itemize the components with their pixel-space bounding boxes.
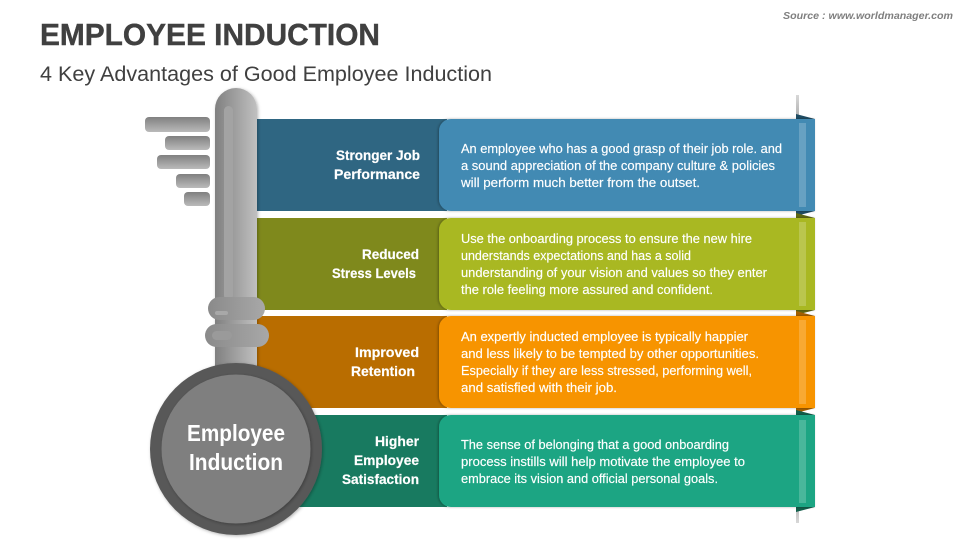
row 1: stronger job performance: [257, 114, 815, 216]
label band: [257, 119, 447, 211]
row 2: reduced stress levels: [257, 213, 815, 315]
description: process instills will help motivate the employee to: [461, 455, 745, 469]
row 4: higher employee satisfaction: [257, 410, 815, 512]
label: [332, 246, 419, 281]
label: Retention: [351, 363, 415, 379]
title: EMPLOYEE INDUCTION: [40, 17, 380, 52]
description: [461, 232, 767, 297]
label: Employee: [354, 452, 419, 468]
description: [460, 142, 782, 190]
key head inner disc: [162, 374, 310, 524]
label: Improved: [355, 344, 419, 360]
shaft highlight: [224, 106, 233, 300]
description: [461, 438, 745, 486]
description: [461, 330, 759, 395]
highlight stripe: [799, 420, 806, 503]
description: The sense of belonging that a good onboarding: [461, 438, 729, 452]
label band: [257, 316, 447, 408]
label: Stress Levels: [332, 265, 416, 281]
label: [334, 147, 420, 182]
key head label: [187, 420, 285, 475]
ribbon folds: [796, 114, 815, 216]
description: the role feeling more assured and confident.: [461, 283, 713, 297]
ribbon folds: [796, 213, 815, 315]
row 3: improved retention: [257, 311, 815, 413]
key illustration: [145, 88, 322, 535]
upper collar: [208, 297, 265, 320]
key teeth: [145, 117, 210, 206]
label: Stronger Job: [336, 147, 420, 163]
vertical ribbon spine: [796, 95, 799, 523]
description: a sound appreciation of the company culture & policies: [461, 159, 775, 173]
label: [351, 344, 419, 379]
description: understanding of your vision and values so they enter: [461, 266, 767, 280]
description: will perform much better from the outset.: [460, 176, 700, 190]
description: An employee who has a good grasp of their job role. and: [461, 142, 782, 156]
label band: [257, 415, 447, 507]
key shaft: [215, 88, 257, 380]
key head label: Employee: [187, 420, 285, 446]
label band: [257, 218, 447, 310]
text panel: [439, 119, 815, 211]
key head outer ring: [150, 363, 322, 535]
description: and less likely to be tempted by other opportunities.: [461, 347, 759, 361]
ribbon folds: [796, 311, 815, 413]
lower collar glint: [212, 331, 232, 340]
description: Use the onboarding process to ensure the new hire: [461, 232, 752, 246]
lower collar: [205, 324, 269, 347]
key head label: Induction: [189, 449, 283, 475]
description: Especially if they are less stressed, performing well,: [461, 364, 752, 378]
text panel: [439, 415, 815, 507]
description: and satisfied with their job.: [461, 381, 617, 395]
highlight stripe: [799, 222, 806, 306]
text panel: [439, 316, 815, 408]
highlight stripe: [799, 123, 806, 207]
source note: Source : www.worldmanager.com: [783, 10, 953, 22]
label: Higher: [375, 433, 420, 449]
description: An expertly inducted employee is typically happier: [461, 330, 748, 344]
upper collar glint: [215, 311, 228, 315]
label: [342, 433, 420, 487]
ribbon folds: [796, 410, 815, 512]
label: Satisfaction: [342, 471, 419, 487]
label: Reduced: [362, 246, 419, 262]
description: understands expectations and has a solid: [461, 249, 691, 263]
label: Performance: [334, 166, 420, 182]
description: embrace its vision and official personal goals.: [461, 472, 718, 486]
highlight stripe: [799, 320, 806, 404]
text panel: [439, 218, 815, 310]
subtitle: 4 Key Advantages of Good Employee Induction: [40, 63, 492, 86]
